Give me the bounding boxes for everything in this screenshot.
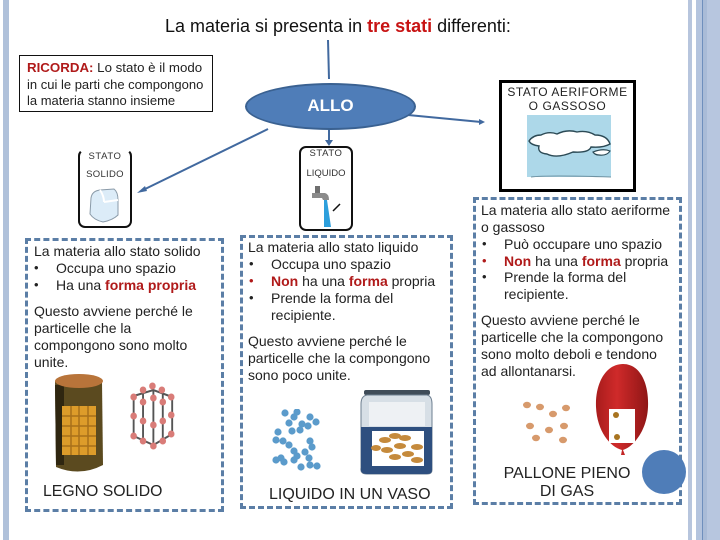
panel: liquido: • (249, 256, 254, 271)
panel: aeriforme: o gassoso (481, 219, 545, 235)
panel: liquido: La materia allo stato liquido (248, 239, 418, 255)
left decorative band (3, 0, 9, 540)
image: liquid particles (272, 409, 321, 471)
card: stato liquido (299, 146, 353, 231)
ellipse: ALLO: ALLO (307, 96, 354, 115)
panel: liquido: particelle che la compongono (248, 350, 430, 366)
image: red balloon (596, 364, 648, 455)
card: stato solido: STATO (88, 151, 122, 162)
panel: aeriforme: ad allontanarsi. (481, 363, 576, 379)
caption: legno solido: LEGNO SOLIDO (43, 483, 162, 500)
panel: liquido: Questo avviene perché le (248, 333, 407, 349)
panel: aeriforme: • (482, 253, 487, 268)
panel: aeriforme: Prende la forma del (504, 269, 626, 285)
image: gas particles (523, 402, 570, 444)
panel: aeriforme: Questo avviene perché le (481, 312, 640, 328)
panel: liquido: • (249, 273, 254, 288)
panel: aeriforme: • (482, 269, 487, 284)
panel: liquido (240, 235, 453, 509)
panel: solido (25, 238, 224, 512)
card: stato liquido: STATO (309, 148, 343, 159)
panel: solido: La materia allo stato solido (34, 243, 201, 259)
panel: liquido: Non ha una forma propria (271, 273, 435, 289)
callout: ricorda: in cui le parti che compongono (27, 77, 203, 92)
image: jar (360, 390, 432, 474)
panel: solido: • (34, 277, 39, 292)
decorative blue circle (642, 450, 686, 494)
panel: solido: particelle che la (34, 320, 131, 336)
panel: aeriforme: sono molto deboli e tendono (481, 346, 657, 362)
panel: aeriforme: • (482, 236, 487, 251)
title: La materia si presenta in tre stati differenti: (165, 16, 511, 36)
icon: tap (312, 186, 340, 227)
callout: ricorda: RICORDA: Lo stato è il modo (27, 60, 202, 75)
card: stato aeriforme (499, 80, 636, 192)
panel: liquido: Occupa uno spazio (271, 256, 391, 272)
icon: cloud (527, 115, 611, 178)
image: wood log (55, 374, 103, 472)
card: stato liquido: LIQUIDO (306, 168, 346, 179)
panel: aeriforme: recipiente. (504, 286, 569, 302)
panel: aeriforme: La materia allo stato aeriforme (481, 202, 670, 218)
callout: ricorda (19, 55, 213, 112)
caption: pallone pieno di gas: PALLONE PIENO (504, 465, 630, 482)
panel: aeriforme (473, 197, 682, 505)
card: stato solido: SOLIDO (86, 169, 124, 180)
panel: liquido: recipiente. (271, 307, 336, 323)
caption: liquido in un vaso: LIQUIDO IN UN VASO (269, 486, 431, 503)
icon: ice cube (90, 188, 118, 222)
ellipse: ALLO (245, 83, 416, 130)
panel: liquido: • (249, 290, 254, 305)
card: stato solido (78, 149, 132, 228)
panel: solido: • (34, 260, 39, 275)
panel: solido: unite. (34, 354, 68, 370)
panel: solido: Occupa uno spazio (56, 260, 176, 276)
panel: liquido: Prende la forma del (271, 290, 393, 306)
caption: pallone pieno di gas: DI GAS (540, 483, 594, 500)
panel: solido: compongono sono molto (34, 337, 187, 353)
panel: liquido: sono poco unite. (248, 367, 351, 383)
caption: pallone pieno di gas (504, 465, 630, 500)
panel: aeriforme: particelle che la compongono (481, 329, 663, 345)
card: stato aeriforme: STATO AERIFORME (507, 85, 628, 99)
panel: solido: Ha una forma propria (56, 277, 196, 293)
panel: solido: Questo avviene perché le (34, 303, 193, 319)
callout: ricorda: la materia stanno insieme (27, 93, 175, 108)
panel: aeriforme: Può occupare uno spazio (504, 236, 662, 252)
right decorative band (688, 0, 720, 540)
image: solid lattice (130, 382, 174, 450)
card: stato aeriforme: O GASSOSO (529, 99, 606, 113)
panel: aeriforme: Non ha una forma propria (504, 253, 668, 269)
